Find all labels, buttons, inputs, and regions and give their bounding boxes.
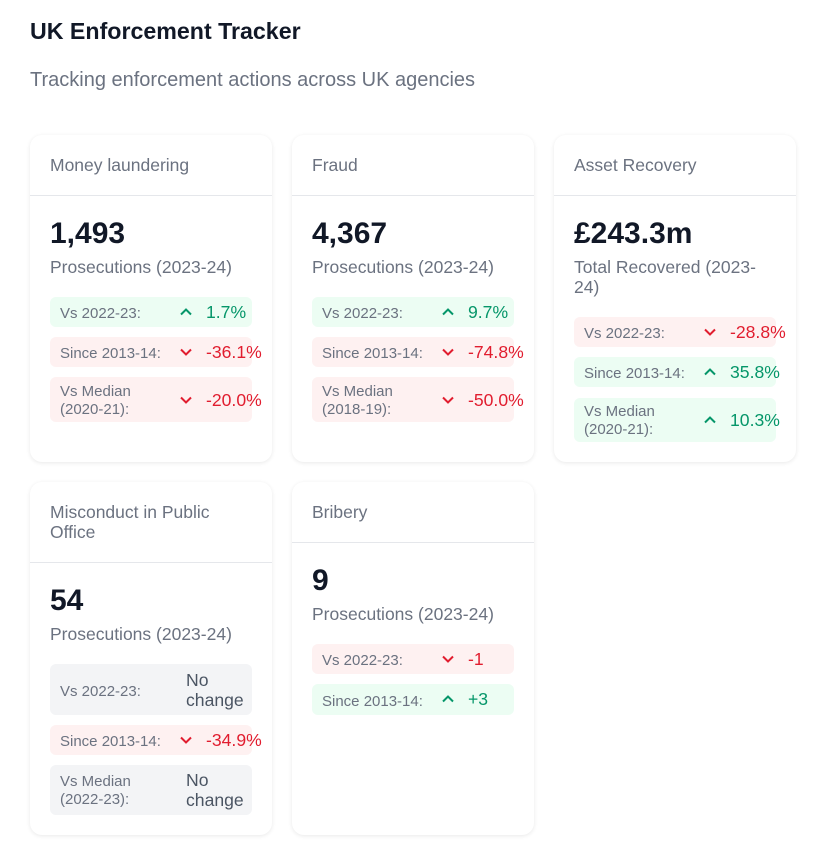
comparison: since 2013-14: -74.8% [468,342,524,362]
headline number: 54 [50,584,83,617]
comparison: since 2013-14 [50,337,252,367]
comparison: since 2013-14: 35.8% [730,362,780,382]
comparison: vs 2022-23: Vs 2022-23: [322,652,403,669]
comparison: since 2013-14: +3 [468,688,488,708]
comparison: vs 2022-23: -1 [468,649,484,669]
comparison: vs median: Vs Median (2020-21): [60,382,131,418]
comparison: vs 2022-23: Vs 2022-23: [322,305,403,322]
comparison: vs 2022-23 [50,664,252,715]
comparison: since 2013-14 [312,684,514,715]
comparison: since 2013-14 [50,725,252,755]
comparison: since 2013-14: Since 2013-14: [584,365,685,382]
comparison: vs 2022-23: Vs 2022-23: [60,682,141,700]
comparison: vs 2022-23: No change [186,670,244,710]
metric label: Prosecutions (2023-24) [50,624,232,644]
comparison: vs median [312,377,514,422]
panel heading [292,482,534,543]
comparison: vs median: -50.0% [468,390,524,410]
comparison: vs 2022-23 [312,297,514,327]
panel heading [30,135,272,196]
comparison: vs median [50,765,252,815]
panel heading: Bribery [312,502,367,522]
comparison: since 2013-14: Since 2013-14: [322,345,423,362]
comparison: vs 2022-23: -28.8% [730,322,786,342]
title: UK Enforcement Tracker [30,18,301,44]
metric label: Total Recovered (2023-24) [574,257,756,297]
panel: bribery [292,482,534,835]
comparison: vs median: Vs Median (2018-19): [322,382,393,418]
headline number: 9 [312,564,329,597]
panel heading: Money laundering [50,155,189,175]
comparison: vs median: Vs Median (2020-21): [584,403,655,438]
comparison: vs median: 10.3% [730,410,780,430]
panel heading: Fraud [312,155,358,175]
panel heading: Misconduct in Public Office [50,502,210,542]
comparison: vs median: Vs Median (2022-23): [60,773,131,808]
comparison: since 2013-14: Since 2013-14: [60,345,161,362]
panel: asset recovery [554,135,796,462]
panel heading [292,135,534,196]
headline number: 4,367 [312,217,387,250]
comparison: vs 2022-23 [312,644,514,674]
comparison: since 2013-14: -36.1% [206,342,262,362]
comparison: vs median [50,377,252,422]
comparison: vs 2022-23 [574,317,776,347]
panel: fraud [292,135,534,462]
comparison: since 2013-14 [574,357,776,387]
headline number: 1,493 [50,217,125,250]
panel heading: Asset Recovery [574,155,697,175]
panel heading [554,135,796,196]
comparison: since 2013-14 [312,337,514,367]
metric label: Prosecutions (2023-24) [312,604,494,624]
subtitle: Tracking enforcement actions across UK agencies [30,69,475,91]
comparison: vs median [574,398,776,442]
comparison: since 2013-14: Since 2013-14: [322,692,423,710]
comparison: vs 2022-23: Vs 2022-23: [60,305,141,322]
panel: money laundering [30,135,272,462]
metric label: Prosecutions (2023-24) [50,257,232,277]
comparison: vs 2022-23: 1.7% [206,302,246,322]
metric label: Prosecutions (2023-24) [312,257,494,277]
comparison: vs 2022-23 [50,297,252,327]
comparison: vs median: No change [186,770,244,810]
comparison: vs median: -20.0% [206,390,262,410]
panel heading [30,482,272,563]
comparison: vs 2022-23: Vs 2022-23: [584,325,665,342]
panel: misconduct in public office [30,482,272,835]
comparison: vs 2022-23: 9.7% [468,302,508,322]
comparison: since 2013-14: Since 2013-14: [60,733,161,750]
headline number: £243.3m [574,217,692,250]
comparison: since 2013-14: -34.9% [206,730,262,750]
